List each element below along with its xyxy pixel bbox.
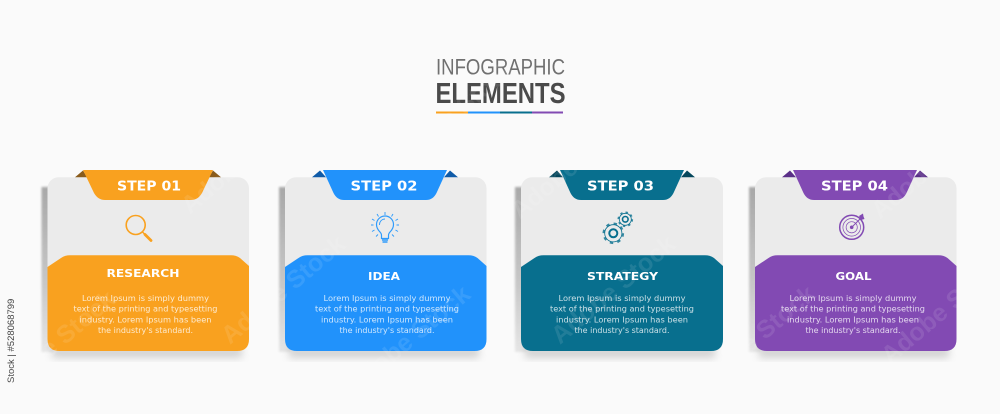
panel: step 02 idea (279, 170, 486, 358)
panel: step 04 goal (749, 170, 956, 358)
watermark: Adobe Stock (216, 230, 351, 350)
step 04 label: STEP 04 (821, 178, 888, 194)
step 02 label: STEP 02 (350, 178, 418, 194)
idea body text: text of the printing and typesetting (315, 304, 459, 314)
watermark: Adobe Stock (341, 280, 476, 400)
idea body text (315, 293, 459, 335)
idea body text: the industry's standard. (340, 325, 434, 335)
watermark: Adobe Stock (866, 105, 1000, 225)
title: ELEMENTS (436, 78, 566, 110)
panel: step 03 strategy (515, 170, 723, 358)
watermark: Adobe Stock (176, 100, 311, 220)
research body text (74, 293, 218, 335)
research body text: Lorem Ipsum is simply dummy (82, 293, 209, 303)
goal body text: Lorem Ipsum is simply dummy (790, 293, 917, 303)
strategy body text: the industry's standard. (574, 325, 670, 335)
idea body text: Lorem Ipsum is simply dummy (324, 293, 451, 303)
title (436, 54, 566, 114)
title: INFOGRAPHIC (436, 54, 565, 80)
goal body text: the industry's standard. (806, 325, 900, 335)
icon: light bulb (371, 212, 399, 242)
stock id side text: Stock | #528068799 (6, 299, 17, 383)
strategy heading: STRATEGY (587, 271, 658, 283)
watermark: Adobe Stock (386, 55, 521, 175)
icon: magnifier (126, 216, 151, 240)
watermark: Adobe Stock (716, 55, 851, 175)
panel: step 01 research (42, 170, 249, 358)
watermark: Adobe Stock (46, 55, 181, 175)
watermark: Adobe Stock (686, 280, 821, 400)
strategy body text: text of the printing and typesetting (550, 304, 694, 314)
watermark: Adobe Stock (506, 105, 641, 225)
step 01 label: STEP 01 (117, 178, 181, 194)
icon: gears (604, 212, 632, 243)
goal body text: text of the printing and typesetting (781, 304, 925, 314)
research body text: industry. Lorem Ipsum has been (80, 314, 212, 324)
watermark: Adobe Stock (546, 230, 681, 350)
strategy body text (550, 293, 694, 335)
goal body text: industry. Lorem Ipsum has been (787, 314, 919, 324)
icon: target (840, 214, 864, 239)
idea heading: IDEA (368, 271, 401, 283)
strategy body text: Lorem Ipsum is simply dummy (558, 293, 686, 303)
watermark: Adobe (661, 0, 739, 70)
strategy body text: industry. Lorem Ipsum has been (556, 314, 688, 324)
research heading: RESEARCH (106, 268, 180, 280)
goal body text (781, 293, 925, 335)
research body text: the industry's standard. (98, 325, 193, 335)
research body text: text of the printing and typesetting (74, 304, 218, 314)
goal heading: GOAL (836, 271, 872, 283)
step 03 label: STEP 03 (587, 178, 654, 194)
idea body text: industry. Lorem Ipsum has been (321, 314, 453, 324)
